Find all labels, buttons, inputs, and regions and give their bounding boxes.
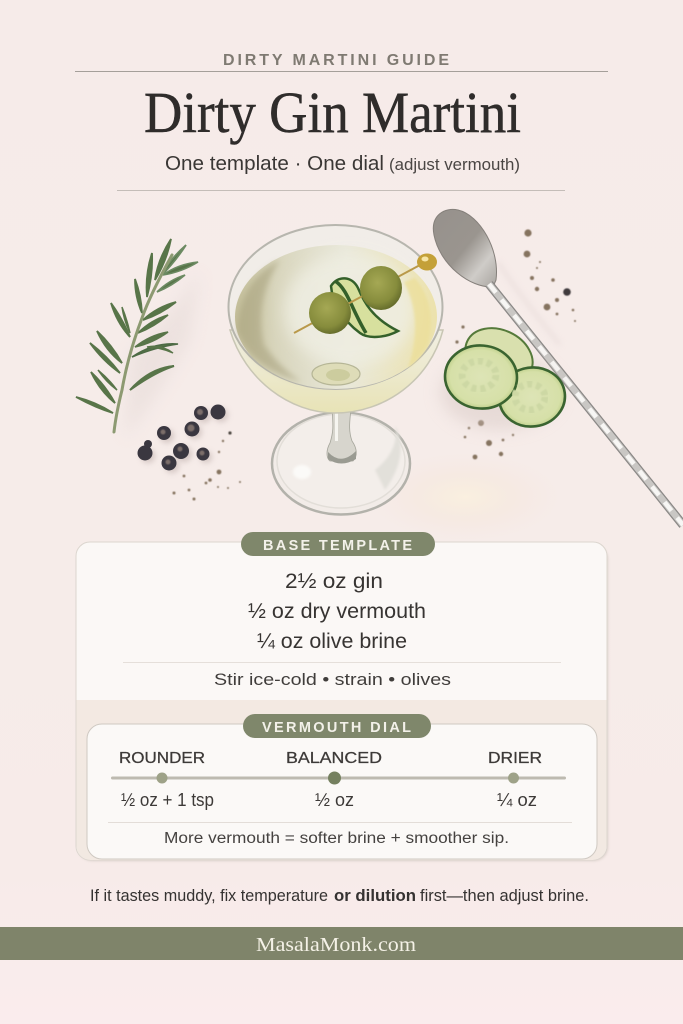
dial note: More vermouth = softer brine + smoother sip. bbox=[164, 830, 509, 847]
ingredient list bbox=[248, 570, 426, 653]
footer band bbox=[0, 927, 683, 960]
panel: base template bbox=[76, 532, 608, 861]
dial values: ½ oz bbox=[315, 790, 354, 810]
panel: vermouth dial bbox=[87, 714, 597, 859]
spice specks bbox=[172, 229, 576, 500]
troubleshooting note bbox=[90, 887, 589, 905]
cucumber ribbon garnish bbox=[331, 278, 398, 337]
troubleshooting note: first—then adjust brine. bbox=[420, 887, 589, 905]
icon: coupe glass bbox=[228, 225, 443, 514]
troubleshooting note: or dilution bbox=[334, 887, 416, 905]
title: Dirty Gin Martini bbox=[144, 80, 521, 145]
glass foot bbox=[272, 412, 410, 514]
pill: base template: BASE TEMPLATE bbox=[263, 538, 412, 554]
icon: cucumber slices bbox=[440, 318, 569, 431]
pill: base template bbox=[241, 532, 435, 556]
method line: Stir ice-cold • strain • olives bbox=[214, 670, 451, 689]
dial values: ¼ oz bbox=[497, 790, 537, 810]
olive back bbox=[360, 266, 402, 310]
cocktail pick bbox=[294, 265, 420, 333]
dial labels bbox=[119, 750, 542, 767]
dial values bbox=[121, 790, 537, 810]
dial values: ½ oz + 1 tsp bbox=[121, 790, 214, 810]
kicker: dirty martini guide: DIRTY MARTINI GUIDE bbox=[223, 52, 449, 69]
pill: vermouth dial bbox=[243, 714, 431, 738]
dial labels: DRIER bbox=[488, 750, 542, 767]
subtitle bbox=[165, 153, 520, 175]
olive front bbox=[309, 292, 351, 334]
warm light caustic bbox=[370, 453, 560, 541]
pill: vermouth dial: VERMOUTH DIAL bbox=[262, 720, 411, 736]
dial labels: ROUNDER bbox=[119, 750, 205, 767]
footer band: MasalaMonk.com bbox=[256, 934, 416, 956]
martini liquid bbox=[235, 245, 437, 389]
troubleshooting note: If it tastes muddy, fix temperature bbox=[90, 887, 328, 905]
glass stem bbox=[327, 408, 356, 461]
dial track bbox=[111, 772, 566, 784]
dial labels: BALANCED bbox=[286, 750, 382, 767]
gold pick ball bbox=[417, 254, 437, 270]
subtitle: One template · One dial bbox=[165, 153, 384, 175]
illustration: martini still life bbox=[76, 209, 683, 541]
ingredient list: ½ oz dry vermouth bbox=[248, 600, 426, 623]
icon: juniper berries bbox=[138, 404, 228, 473]
glass bowl bbox=[230, 330, 443, 413]
icon: rosemary sprig bbox=[76, 239, 200, 440]
subtitle: (adjust vermouth) bbox=[389, 155, 520, 174]
ingredient list: ¼ oz olive brine bbox=[257, 630, 407, 653]
ingredient list: 2½ oz gin bbox=[285, 570, 383, 593]
header bbox=[75, 52, 608, 191]
icon: bar spoon bbox=[433, 209, 683, 525]
